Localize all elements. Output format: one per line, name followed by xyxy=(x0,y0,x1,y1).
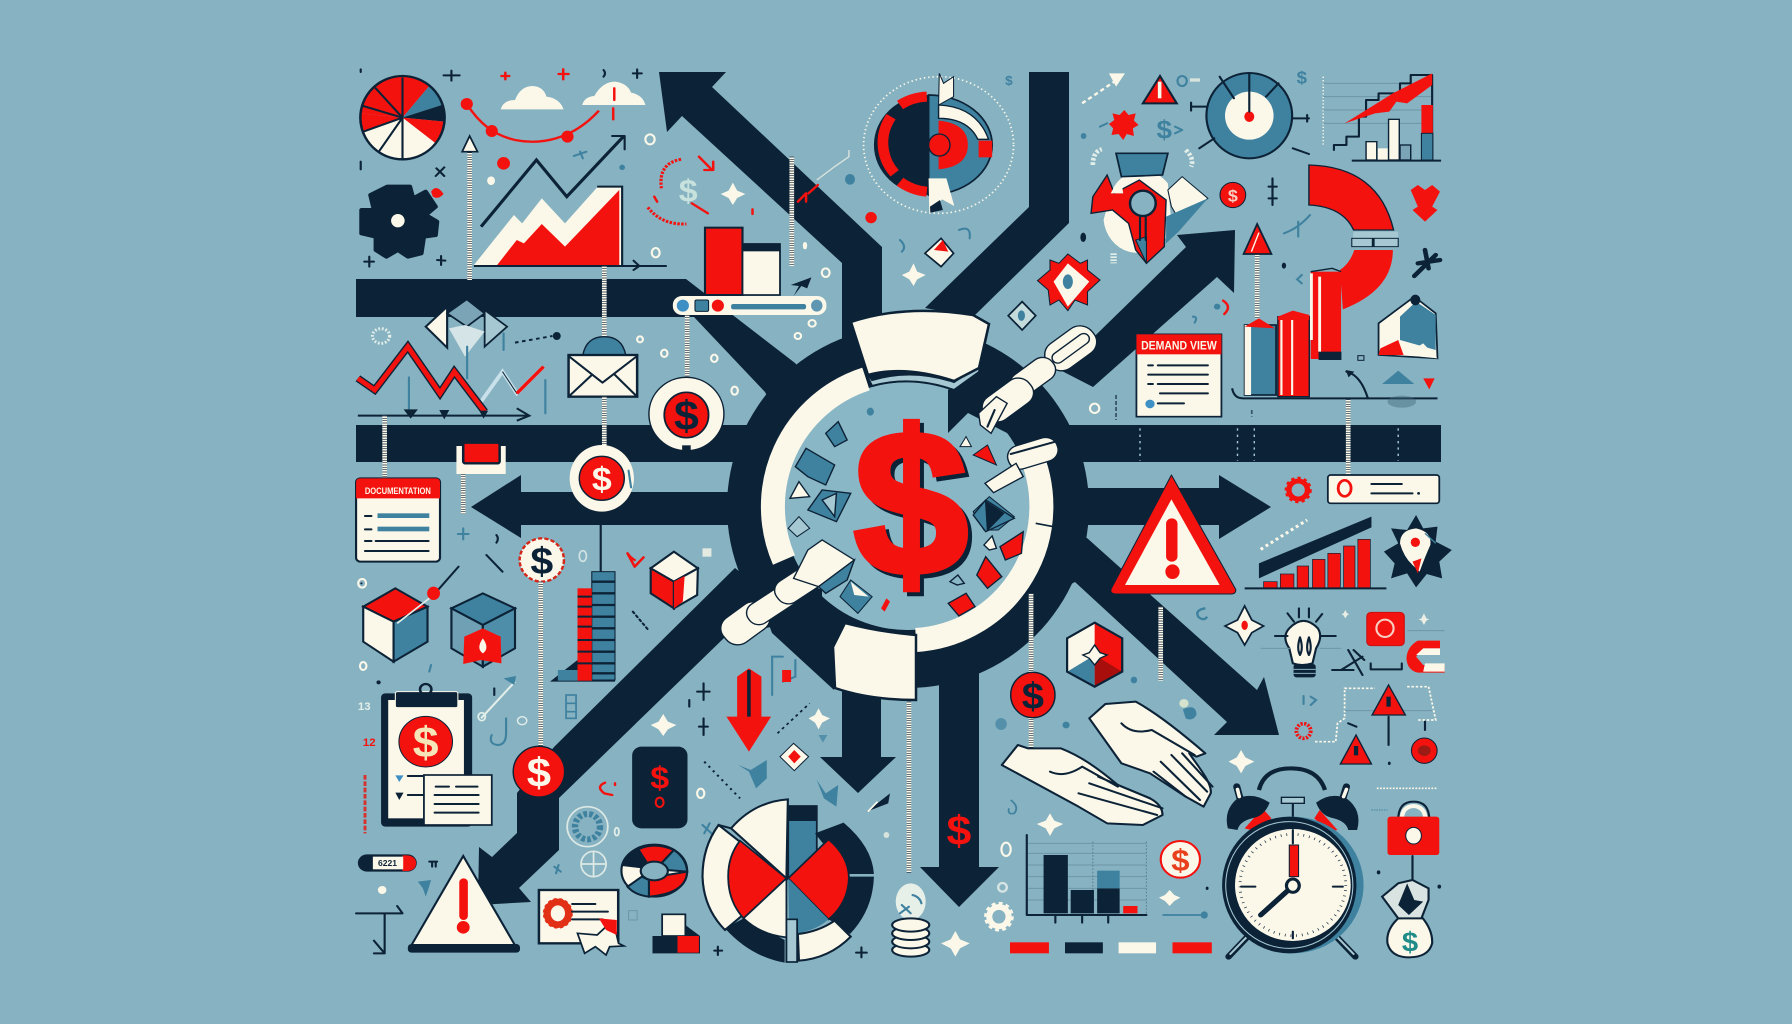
arrow: down left of centre xyxy=(820,680,896,793)
shards left xyxy=(790,408,874,522)
red header card xyxy=(1136,334,1221,417)
teal dollar: $ xyxy=(1297,68,1307,87)
dollar seal xyxy=(520,538,564,583)
navy cross icon xyxy=(1414,250,1440,276)
red coin on line: $ xyxy=(1022,676,1044,717)
cream ring left arc xyxy=(773,379,866,560)
dollar medallion navy xyxy=(649,377,724,453)
bar pair xyxy=(705,228,780,295)
small annotations xyxy=(1090,356,1435,420)
rising bar chart xyxy=(1245,517,1386,588)
zigzag trend arrow xyxy=(481,136,625,227)
dollar cycle xyxy=(648,157,752,224)
red tag xyxy=(456,443,506,474)
dollar medallion cream xyxy=(570,445,634,512)
inner disc xyxy=(783,382,1031,630)
envelope xyxy=(569,337,637,397)
navy wedge lower left xyxy=(760,575,834,690)
dollar seal: $ xyxy=(530,540,553,583)
status pill xyxy=(358,854,417,872)
wrench sketch xyxy=(478,676,527,745)
alert triangle small xyxy=(1143,76,1177,103)
block stack xyxy=(652,914,700,953)
red coin small xyxy=(1220,182,1246,208)
phone: $ xyxy=(650,759,669,795)
big warning triangle xyxy=(1111,475,1236,594)
alert network xyxy=(1296,685,1437,765)
shards right xyxy=(948,500,1023,616)
small red diamond xyxy=(780,743,809,771)
red dollar coin outline: $ xyxy=(1171,843,1190,877)
report card with burst xyxy=(539,890,624,955)
finger lines xyxy=(1050,723,1212,815)
status pill: 6221 xyxy=(378,858,397,868)
teal curl xyxy=(1197,608,1207,619)
navy connector to tower xyxy=(598,525,604,572)
quadrant: bottom right xyxy=(892,475,1452,958)
teal dollar and dots: $ xyxy=(1157,115,1172,144)
arrow: upper left bar xyxy=(356,279,830,440)
shards lower left xyxy=(788,517,890,613)
red dollar coin outline xyxy=(1161,841,1200,878)
falling zigzag chart xyxy=(358,347,545,421)
connector: below ring right xyxy=(909,593,1161,873)
right info box xyxy=(1328,475,1439,503)
clipboard xyxy=(381,684,492,827)
padlock xyxy=(1371,788,1441,889)
navy wedge upper right xyxy=(948,360,1062,452)
top clamp xyxy=(851,311,989,390)
teal marks xyxy=(900,215,1310,263)
donut chart xyxy=(621,845,687,897)
teal glyphs xyxy=(554,735,838,873)
connector ladder xyxy=(534,582,547,748)
legend swatches xyxy=(1010,942,1212,953)
red sidebar marks xyxy=(358,701,376,833)
bottom clamp xyxy=(833,623,916,700)
hands xyxy=(1002,702,1212,825)
upper hand xyxy=(1089,702,1211,807)
big dollar sign: $ xyxy=(858,393,972,622)
area chart xyxy=(474,187,667,270)
cube: teal xyxy=(451,593,515,667)
red down arrow xyxy=(726,668,771,752)
teal tag xyxy=(1177,76,1200,86)
arrow: right pointing xyxy=(1050,475,1271,539)
lower hand xyxy=(1002,745,1162,825)
card heading: DEMAND VIEW xyxy=(1141,339,1217,352)
lower chain xyxy=(715,540,854,650)
small marks xyxy=(358,528,711,684)
tree glyph xyxy=(1332,650,1402,675)
globe mesh circles xyxy=(567,807,608,877)
upper chain xyxy=(977,320,1103,433)
cream cluster xyxy=(372,329,390,343)
alarm clock xyxy=(1222,768,1364,957)
sparkle xyxy=(902,263,926,286)
clipboard: $ xyxy=(413,718,439,767)
dashed arrow xyxy=(1082,73,1125,103)
card heading: DOCUMENTATION xyxy=(365,486,431,496)
radial arrows xyxy=(356,72,1441,907)
light bulb xyxy=(1261,608,1341,677)
hexagon xyxy=(1067,623,1122,687)
quadrant: top right xyxy=(864,68,1441,530)
gear icon xyxy=(359,187,444,257)
dollar medallion cream: $ xyxy=(592,462,612,498)
large red arc xyxy=(1309,165,1398,309)
navy outer ring xyxy=(727,326,1089,688)
coin stack with globe xyxy=(892,883,929,957)
cream ring right arc xyxy=(916,450,1041,640)
red dollar on arrow: $ xyxy=(947,808,971,855)
red up arrow on ladder xyxy=(1244,224,1271,318)
small red alert diamond xyxy=(925,238,954,267)
red dollar coin: $ xyxy=(527,750,551,795)
arrow: lower right xyxy=(1040,520,1279,735)
cube: red left xyxy=(651,552,698,608)
phone xyxy=(632,747,687,828)
small pictograms xyxy=(378,862,437,897)
cloud with alert xyxy=(582,82,645,119)
big dollar sign: $ xyxy=(854,389,968,618)
red gear xyxy=(1286,478,1310,502)
small bar chart xyxy=(1027,835,1146,923)
ring tick xyxy=(1036,523,1054,527)
split target xyxy=(874,73,992,213)
cream gear xyxy=(986,883,1012,930)
spiky burst xyxy=(1384,515,1452,587)
slider xyxy=(1162,887,1209,919)
small chart marks xyxy=(566,657,810,735)
sparkles small xyxy=(1341,610,1429,625)
money bag: $ xyxy=(1402,928,1418,958)
red badge xyxy=(1367,612,1445,646)
document card left xyxy=(356,478,440,562)
red dollar coin xyxy=(513,746,565,797)
warning triangle cream xyxy=(408,856,520,953)
arrow: right bar xyxy=(1040,425,1441,462)
gauge xyxy=(1191,73,1309,158)
connectors xyxy=(385,266,687,514)
dashes on right bar xyxy=(1140,428,1398,461)
small teal dollar: $ xyxy=(1005,73,1013,88)
central ring: broken dollar xyxy=(727,311,1089,700)
connector xyxy=(785,157,798,266)
small navy arrow xyxy=(791,277,811,296)
folded diamond shape xyxy=(426,299,561,378)
red coin on line xyxy=(1011,672,1055,770)
compass star xyxy=(1225,606,1264,645)
connector arrow up xyxy=(462,136,477,280)
toolbar xyxy=(673,296,826,315)
folded box house xyxy=(1379,295,1437,358)
teal dollar and dots xyxy=(1081,115,1192,167)
small crosses xyxy=(629,793,890,957)
quadrant: bottom left xyxy=(356,517,890,963)
cloud xyxy=(501,86,564,109)
ladder connector xyxy=(1342,399,1355,474)
3D bar chart xyxy=(1232,268,1437,398)
quadrant: top left xyxy=(356,69,877,562)
small red and teal marks xyxy=(1193,263,1302,323)
red coin small: $ xyxy=(1228,186,1238,206)
red curve with nodes xyxy=(461,98,599,143)
sparkles xyxy=(651,708,830,736)
tower chart xyxy=(550,572,615,682)
star marks xyxy=(361,162,445,267)
dollar cycle: $ xyxy=(679,173,698,208)
small marks row xyxy=(361,69,642,81)
sparkle xyxy=(721,183,745,205)
arrow: down centre xyxy=(920,650,999,907)
target dashed ring xyxy=(864,77,1014,213)
shards xyxy=(960,437,1014,530)
arrow: lower left xyxy=(478,568,800,905)
arrow: top-left xyxy=(659,72,882,340)
big pie xyxy=(702,799,874,963)
sparkles xyxy=(941,750,1254,957)
lower chain fragment xyxy=(985,435,1061,493)
step chart xyxy=(1323,73,1441,161)
arrow signpost xyxy=(356,906,402,953)
broken gear assembly xyxy=(1091,153,1208,263)
red double arrow xyxy=(1411,185,1440,222)
arrow: top centre path xyxy=(925,72,1069,317)
red sidebar marks: 12 xyxy=(363,737,376,749)
teal marks xyxy=(995,677,1316,856)
dollar medallion navy: $ xyxy=(674,393,699,440)
red burst xyxy=(1109,110,1139,140)
arrow: middle left bar xyxy=(356,425,760,462)
navy tick mark xyxy=(1269,178,1277,205)
cube: red top xyxy=(363,567,459,662)
red star emblem xyxy=(1037,254,1100,311)
dots xyxy=(487,134,655,185)
diamond teal xyxy=(1008,302,1036,330)
red marks xyxy=(798,150,877,223)
money bag xyxy=(1382,880,1432,958)
pie chart xyxy=(360,76,445,159)
arrow: upper right xyxy=(1060,230,1235,387)
arrow: left pointing xyxy=(471,475,760,538)
red sidebar marks: 13 xyxy=(358,701,371,713)
tiny circle marks xyxy=(637,243,830,395)
magnet icon xyxy=(1406,641,1445,673)
